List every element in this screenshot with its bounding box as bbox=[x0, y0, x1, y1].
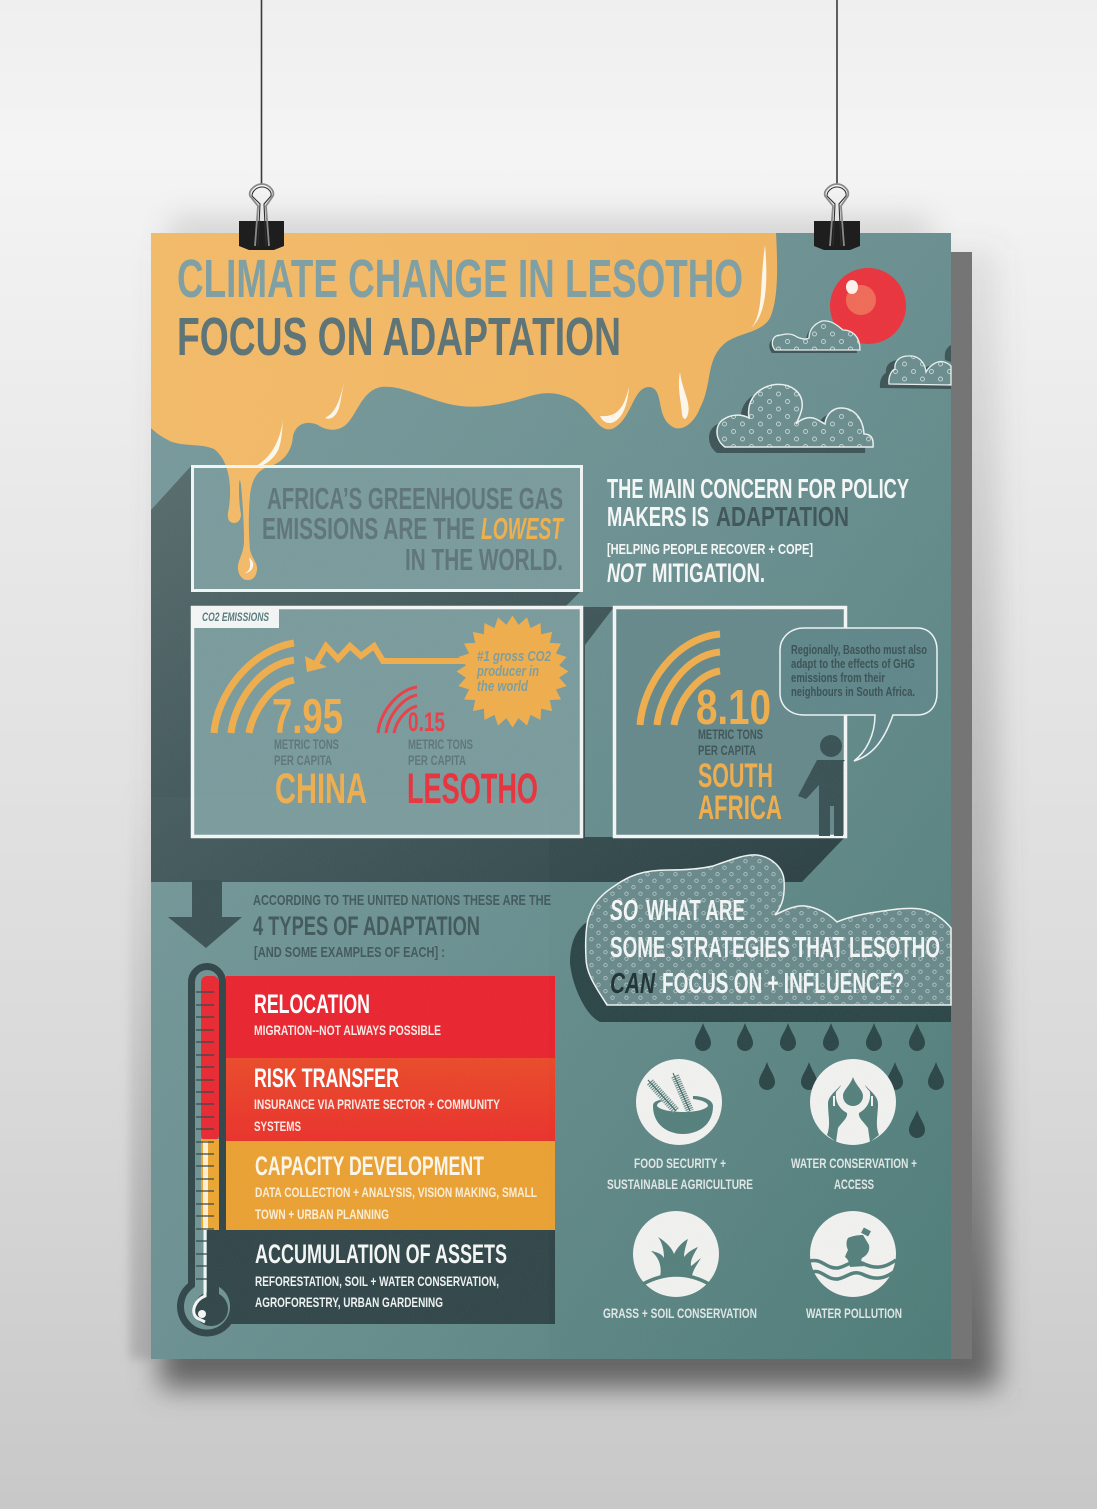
panel: relocation: RELOCATION bbox=[254, 989, 370, 1019]
icon: red sun bbox=[830, 268, 906, 344]
greenhouse gas statement: IN THE WORLD. bbox=[405, 542, 563, 577]
panel: accumulation of assets: AGROFORESTRY, URBAN GARDENING bbox=[255, 1294, 443, 1310]
callout: starburst number one producer bbox=[456, 616, 568, 728]
South Africa figures: 8.10 bbox=[696, 681, 771, 735]
greenhouse gas statement: LOWEST bbox=[481, 511, 565, 546]
callout: speech bubble: Regionally, Basotho must also bbox=[791, 642, 927, 657]
text block: policy makers concern: ADAPTATION bbox=[716, 501, 849, 532]
paper grain bbox=[151, 233, 951, 1359]
panel: accumulation of assets bbox=[207, 1230, 555, 1324]
panel: accumulation of assets: REFORESTATION, SOIL + WATER CONSERVATION, bbox=[255, 1273, 499, 1289]
strategies question bbox=[610, 895, 940, 1000]
South Africa figures: METRIC TONS bbox=[698, 726, 763, 742]
heading: four types of adaptation: ACCORDING TO THE UNITED NATIONS THESE ARE THE bbox=[253, 892, 551, 909]
strategy labels: FOOD SECURITY + bbox=[634, 1155, 726, 1171]
panel: capacity development: TOWN + URBAN PLANNING bbox=[255, 1206, 389, 1222]
chart: thermometer bbox=[181, 966, 234, 1333]
panel: risk transfer bbox=[226, 1058, 555, 1141]
panel: risk transfer: INSURANCE VIA PRIVATE SECTOR + COMMUNITY bbox=[254, 1096, 500, 1112]
South Africa figures: PER CAPITA bbox=[698, 742, 756, 758]
South Africa figures: SOUTH bbox=[698, 757, 773, 795]
panel: CO2 emissions China and Lesotho bbox=[192, 607, 582, 836]
strategy labels: SUSTAINABLE AGRICULTURE bbox=[607, 1176, 753, 1192]
Lesotho figures: LESOTHO bbox=[407, 765, 538, 813]
heading: four types of adaptation bbox=[253, 892, 551, 961]
panel: strategies cloud bbox=[570, 855, 951, 1022]
Lesotho figures: PER CAPITA bbox=[408, 752, 466, 768]
icon: right binder clip bbox=[814, 184, 860, 250]
poster sheet bbox=[151, 233, 951, 1359]
Lesotho figures: 0.15 bbox=[408, 707, 445, 737]
hanging wires bbox=[262, 0, 837, 184]
title: FOCUS ON ADAPTATION bbox=[177, 307, 621, 367]
callout: starburst number one producer: #1 gross CO2 bbox=[477, 648, 551, 665]
melt highlights bbox=[245, 245, 766, 573]
strategies question: WHAT ARE bbox=[646, 895, 745, 927]
icon: left binder clip bbox=[239, 184, 284, 250]
panel: risk transfer: SYSTEMS bbox=[254, 1118, 301, 1134]
panel: risk transfer: RISK TRANSFER bbox=[254, 1063, 399, 1093]
greenhouse gas statement: AFRICA’S GREENHOUSE GAS bbox=[267, 481, 563, 516]
Lesotho figures bbox=[407, 707, 538, 813]
long shadow band behind boxes bbox=[151, 465, 845, 882]
arrow: down to types of adaptation bbox=[168, 880, 242, 948]
panel: relocation bbox=[226, 976, 555, 1058]
icon: large cloud bbox=[709, 384, 873, 453]
icon: right cloud bbox=[880, 345, 951, 389]
text block: policy makers concern: MITIGATION. bbox=[652, 558, 765, 588]
Lesotho figures: METRIC TONS bbox=[408, 736, 473, 752]
China figures: CHINA bbox=[275, 765, 367, 813]
callout: speech bubble: emissions from their bbox=[791, 670, 885, 685]
callout: speech bubble: adapt to the effects of GHG bbox=[791, 656, 915, 671]
callout: starburst number one producer: producer in bbox=[476, 663, 539, 680]
lower-left fold tint bbox=[151, 797, 549, 1359]
callout: starburst number one producer: the world bbox=[477, 678, 529, 695]
strategy labels: ACCESS bbox=[834, 1176, 874, 1192]
tab label: CO2 emissions: CO2 EMISSIONS bbox=[202, 610, 269, 624]
icon: person bbox=[798, 735, 845, 836]
title: CLIMATE CHANGE IN LESOTHO bbox=[177, 249, 743, 309]
strategies question: SO bbox=[610, 895, 638, 927]
icon: water conservation hands and drop bbox=[810, 1059, 896, 1145]
icon: rain drops bbox=[695, 1023, 944, 1138]
text block: policy makers concern: NOT bbox=[607, 558, 647, 588]
heading: four types of adaptation: 4 TYPES OF ADAPTATION bbox=[253, 911, 480, 941]
title bbox=[177, 249, 743, 367]
greenhouse gas statement: EMISSIONS ARE THE bbox=[262, 511, 475, 546]
icon: grass and soil bbox=[633, 1211, 719, 1297]
text block: policy makers concern: MAKERS IS bbox=[607, 501, 709, 532]
arrow: zigzag from starburst to China bbox=[305, 646, 470, 672]
China figures bbox=[272, 690, 367, 813]
text block: policy makers concern: THE MAIN CONCERN FOR POLICY bbox=[607, 473, 909, 504]
callout: speech bubble: neighbours in South Africa. bbox=[791, 684, 915, 699]
panel: capacity development: DATA COLLECTION + ANALYSIS, VISION MAKING, SMALL bbox=[255, 1184, 537, 1200]
icon: Lesotho emission arcs bbox=[378, 687, 417, 733]
strategy labels: WATER CONSERVATION + bbox=[791, 1155, 917, 1171]
icon: water pollution bottle and waves bbox=[810, 1211, 896, 1297]
China figures: PER CAPITA bbox=[274, 752, 332, 768]
heading: four types of adaptation: [AND SOME EXAMPLES OF EACH] : bbox=[254, 944, 445, 961]
South Africa figures bbox=[696, 681, 782, 827]
poster cast shadow bbox=[130, 218, 998, 1388]
panel: capacity development bbox=[226, 1141, 555, 1230]
icon: China emission arcs bbox=[214, 643, 294, 733]
South Africa figures: AFRICA bbox=[698, 789, 782, 827]
panel: capacity development: CAPACITY DEVELOPMENT bbox=[255, 1151, 484, 1181]
icon: food security bowl and wheat bbox=[636, 1059, 722, 1145]
China figures: METRIC TONS bbox=[274, 736, 339, 752]
text block: policy makers concern: [HELPING PEOPLE RECOVER + COPE] bbox=[607, 541, 813, 558]
panel: accumulation of assets: ACCUMULATION OF ASSETS bbox=[255, 1239, 507, 1269]
strategies question: FOCUS ON + INFLUENCE? bbox=[662, 968, 904, 1000]
text block: policy makers concern bbox=[607, 473, 909, 588]
panel: South Africa bbox=[614, 608, 846, 836]
strategy labels bbox=[603, 1155, 917, 1321]
tab label: CO2 emissions bbox=[192, 607, 279, 628]
strategy labels: WATER POLLUTION bbox=[806, 1305, 902, 1321]
greenhouse gas statement bbox=[262, 481, 565, 577]
strategies question: CAN bbox=[610, 968, 656, 1000]
panel: relocation: MIGRATION--NOT ALWAYS POSSIBLE bbox=[254, 1022, 441, 1038]
China figures: 7.95 bbox=[272, 690, 343, 744]
icon: South Africa emission arcs bbox=[640, 634, 720, 725]
icon: small cloud by sun bbox=[769, 321, 860, 353]
callout: speech bubble bbox=[780, 628, 937, 761]
panel: greenhouse gas box bbox=[192, 466, 582, 590]
strategy labels: GRASS + SOIL CONSERVATION bbox=[603, 1305, 757, 1321]
melting header shape bbox=[151, 233, 777, 580]
panel: greenhouse gas box fill bbox=[192, 466, 582, 590]
